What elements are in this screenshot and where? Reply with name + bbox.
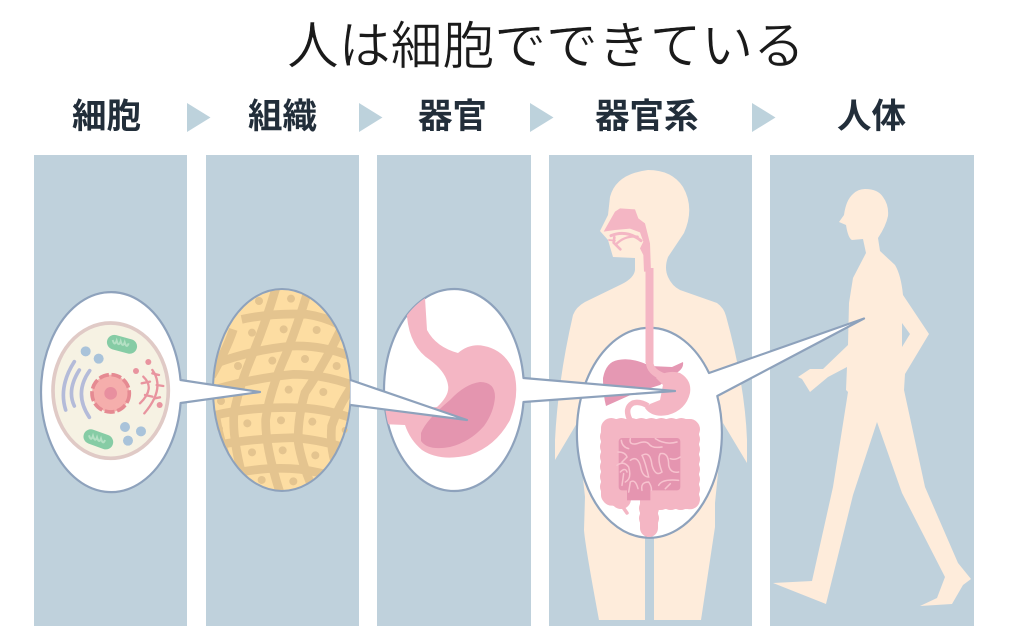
nucleolus [104,387,117,400]
arrow: tissue to organ [359,103,382,132]
heading: cell: 細胞 [72,98,141,136]
heading: organ system: 器官系 [595,98,698,136]
airway and esophagus [604,208,654,363]
arrow: cell to tissue [187,103,210,132]
large intestine [610,428,690,537]
stomach [380,298,516,458]
panel: cell [34,155,187,626]
callout: tissue [210,288,467,493]
arrow: organ system to human body [752,103,776,132]
tail of the tissue callout [350,380,467,420]
esophagus and stomach [628,320,690,420]
heading: human body: 人体 [837,98,906,136]
panel: organ system [549,155,752,626]
tissue outline [213,289,351,491]
callout: stomach organ [380,289,675,491]
cell diagram [53,323,168,458]
golgi body [63,362,90,417]
mitochondria [81,333,139,451]
panel: tissue [206,155,359,626]
title: 人は細胞でできている [287,17,805,75]
endoplasmic reticulum [140,370,163,413]
stomach lining [421,382,495,448]
walking human silhouette [773,189,971,606]
liver [603,359,683,406]
panel: human body [770,155,974,626]
tissue cell grid [210,288,353,493]
torso silhouette with head [555,170,747,620]
nucleus [92,375,129,412]
callout: digestive system [577,318,864,538]
panel: organ [377,155,531,626]
callout: animal cell [41,292,260,492]
vesicles [81,346,146,446]
cell nuclei [217,295,348,485]
arrow: organ to organ system [530,103,554,132]
small intestine [617,438,680,500]
heading: tissue: 組織 [248,98,317,136]
heading: organ: 器官 [418,98,487,136]
